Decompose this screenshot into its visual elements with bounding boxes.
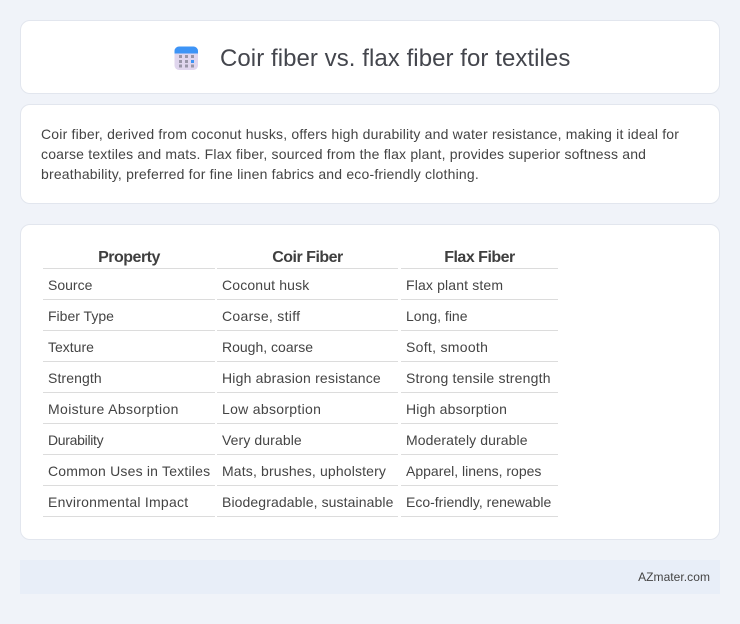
footer bar [20,560,720,594]
row: environmental impact [43,494,558,517]
row: fiber type: Coarse, stiff [222,308,300,324]
row: environmental impact: Environmental Impact [48,494,188,510]
row: durability: Moderately durable [406,432,528,448]
row: texture: Rough, coarse [222,339,313,355]
row: fiber type: Long, fine [406,308,468,324]
row: strength: Strength [48,370,102,386]
row: fiber type [43,308,558,331]
footer source label: AZmater.com [638,570,710,584]
row: fiber type: Fiber Type [48,308,114,324]
intro paragraph: breathability, preferred for fine linen fabrics and eco-friendly clothing. [41,166,479,182]
row: texture [43,339,558,362]
row: source: Coconut husk [222,277,309,293]
header row [43,249,558,269]
row: durability: Very durable [222,432,302,448]
row: common uses [43,463,558,486]
title card [20,20,720,94]
header row: Flax Fiber [444,249,515,266]
row: texture: Texture [48,339,94,355]
row: environmental impact: Eco-friendly, renewable [406,494,551,510]
intro paragraph: coarse textiles and mats. Flax fiber, sourced from the flax plant, provides superior softness and [41,146,646,162]
row: durability [43,432,558,455]
row: strength: Strong tensile strength [406,370,551,386]
row: durability: Durability [48,432,103,448]
row: common uses: Apparel, linens, ropes [406,463,541,479]
header row: Property [98,249,160,266]
row: source: Source [48,277,92,293]
row: moisture absorption: Moisture Absorption [48,401,179,417]
row: environmental impact: Biodegradable, sustainable [222,494,394,510]
title: Coir fiber vs. flax fiber for textiles [220,45,570,72]
row: common uses: Common Uses in Textiles [48,463,210,479]
row: strength: High abrasion resistance [222,370,381,386]
row: moisture absorption [43,401,558,424]
row: common uses: Mats, brushes, upholstery [222,463,386,479]
row: moisture absorption: High absorption [406,401,507,417]
row: source: Flax plant stem [406,277,503,293]
row: strength [43,370,558,393]
intro paragraph [41,126,679,182]
row: source [43,277,558,300]
intro text card [20,104,720,204]
icon: calendar [174,46,198,70]
comparison table card [20,224,720,540]
header row: Coir Fiber [272,249,343,266]
row: texture: Soft, smooth [406,339,488,355]
row: moisture absorption: Low absorption [222,401,321,417]
comparison table [43,249,558,517]
intro paragraph: Coir fiber, derived from coconut husks, offers high durability and water resistance, making it ideal for [41,126,679,142]
